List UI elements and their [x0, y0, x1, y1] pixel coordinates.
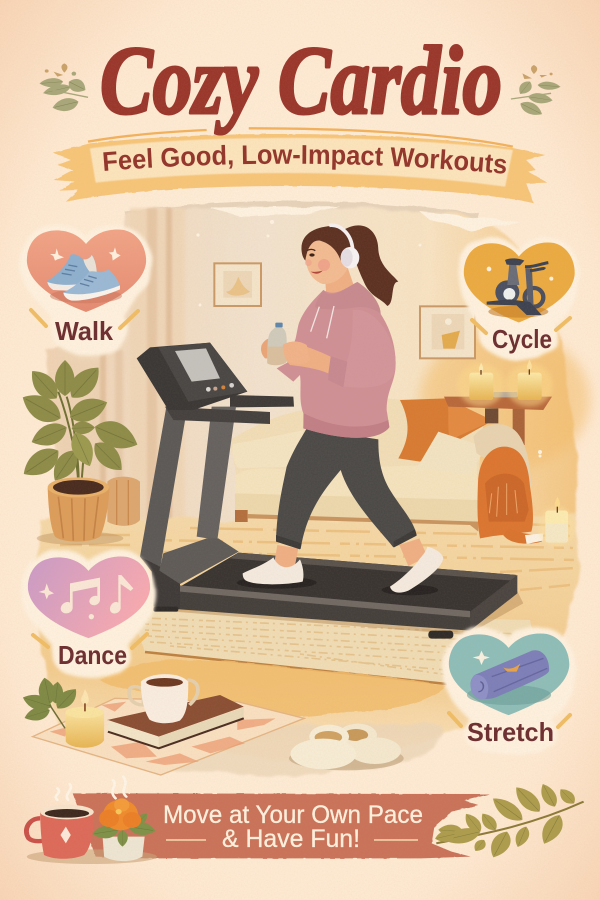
accent ticks — [449, 713, 570, 727]
headphones — [329, 225, 359, 268]
motor cover — [159, 538, 239, 584]
wall paint splashes — [196, 206, 542, 458]
candle on table right — [506, 360, 553, 407]
cuff — [328, 356, 347, 387]
facial features — [305, 249, 330, 274]
label: Cycle: Cycle — [492, 324, 552, 354]
coffee cup — [129, 674, 198, 723]
ponytail — [343, 225, 398, 306]
candle on table left — [458, 363, 504, 407]
lower floor shadow — [50, 723, 444, 776]
footer leaf branch — [434, 782, 584, 861]
floor shadow under treadmill — [153, 590, 523, 635]
sprig — [20, 677, 82, 728]
candle — [65, 689, 104, 748]
heart badge: stretch — [442, 627, 576, 754]
heart shape — [27, 230, 146, 312]
drawstrings — [311, 306, 334, 338]
hair — [301, 226, 353, 261]
rug still life — [20, 674, 404, 775]
slippers — [289, 724, 404, 770]
red mug — [26, 805, 94, 859]
hoodie hem — [303, 413, 389, 438]
heart shape — [28, 556, 150, 638]
heart shape — [449, 633, 569, 715]
book — [107, 695, 244, 748]
face — [305, 233, 350, 284]
wall glow — [420, 330, 590, 470]
candle on floor — [538, 497, 575, 547]
leggings — [276, 428, 417, 549]
warm floor patch — [100, 660, 447, 718]
orange pillow — [398, 398, 493, 462]
treadmill — [137, 343, 523, 639]
orange flower — [99, 798, 141, 830]
right shoe — [390, 547, 443, 593]
heart shape — [464, 242, 575, 322]
feet — [153, 607, 453, 639]
sofa arm — [473, 424, 532, 487]
stems — [58, 392, 87, 488]
front upright post — [140, 405, 187, 569]
label: Stretch: Stretch — [467, 717, 554, 747]
shoe shadows — [237, 577, 438, 595]
leaves — [17, 360, 142, 486]
belt deck — [180, 553, 517, 613]
console — [137, 343, 247, 410]
subtitle — [103, 164, 507, 174]
hoodie — [277, 282, 396, 438]
back hand — [261, 338, 273, 358]
subtitle ribbon: Feel Good, Low-Impact Workouts — [103, 144, 506, 174]
right-side room furniture — [214, 263, 493, 532]
white flower pot — [103, 837, 145, 861]
side table — [444, 392, 552, 445]
ground shadow — [27, 849, 157, 864]
accent ticks — [33, 634, 147, 648]
bike icon — [487, 258, 553, 318]
wicker pot — [48, 477, 109, 542]
base — [140, 557, 180, 609]
second upright post — [197, 407, 236, 540]
neck — [325, 267, 354, 302]
music notes icon — [39, 575, 133, 619]
title ornament left — [39, 63, 89, 114]
console buttons — [206, 383, 234, 392]
picture frame right — [420, 306, 475, 358]
banner line two: & Have Fun! — [222, 825, 360, 853]
label halo — [442, 627, 576, 754]
potted plant — [17, 360, 142, 545]
floor planks — [60, 520, 575, 590]
fingers — [283, 341, 310, 364]
woman walking — [237, 225, 443, 595]
steam — [56, 777, 126, 800]
subtitle ribbon — [53, 127, 547, 204]
forearm and hand — [282, 343, 331, 373]
sleeve — [343, 310, 396, 388]
banner brush — [73, 793, 490, 858]
label halo — [20, 224, 152, 356]
curtains — [60, 208, 185, 520]
orange cat — [477, 447, 543, 544]
banner rules — [166, 839, 418, 841]
shoes icon — [47, 247, 122, 303]
accent ticks — [31, 310, 138, 328]
label halo — [20, 549, 156, 678]
cozy living room scene — [35, 201, 590, 776]
top wash — [125, 201, 480, 232]
room wall wash — [46, 207, 578, 530]
sofa — [230, 398, 483, 532]
footer mug and flowers — [26, 777, 157, 864]
side table, candles and cat — [444, 360, 575, 547]
picture frame left — [214, 263, 261, 306]
water bottle — [267, 323, 287, 365]
placemat — [33, 698, 304, 775]
rug edge — [145, 652, 447, 684]
floor — [35, 515, 580, 768]
title: Cozy Cardio — [100, 27, 502, 135]
folded towel icon — [467, 650, 551, 705]
rear handlebar — [230, 395, 294, 407]
label: Walk: Walk — [55, 316, 114, 346]
hood — [315, 282, 381, 314]
title ornament right — [511, 65, 561, 119]
label: Dance: Dance — [58, 640, 127, 670]
footer banner — [73, 793, 490, 858]
area rug — [130, 610, 545, 690]
side rail — [165, 407, 270, 424]
floor shadow — [37, 532, 123, 545]
ankles — [273, 538, 427, 571]
cream pillow — [417, 432, 486, 474]
console screen — [175, 348, 220, 382]
heart badge: walk — [20, 224, 152, 356]
label halo — [458, 237, 580, 360]
foliage — [91, 811, 157, 847]
ribbon brush shape — [53, 128, 547, 203]
heart badge: cycle — [458, 237, 580, 360]
accent ticks — [472, 318, 570, 333]
side frame — [180, 586, 470, 631]
left shoe — [243, 557, 303, 584]
heart badge: dance — [20, 549, 156, 678]
second basket — [107, 477, 140, 526]
banner line one: Move at Your Own Pace — [163, 801, 423, 829]
